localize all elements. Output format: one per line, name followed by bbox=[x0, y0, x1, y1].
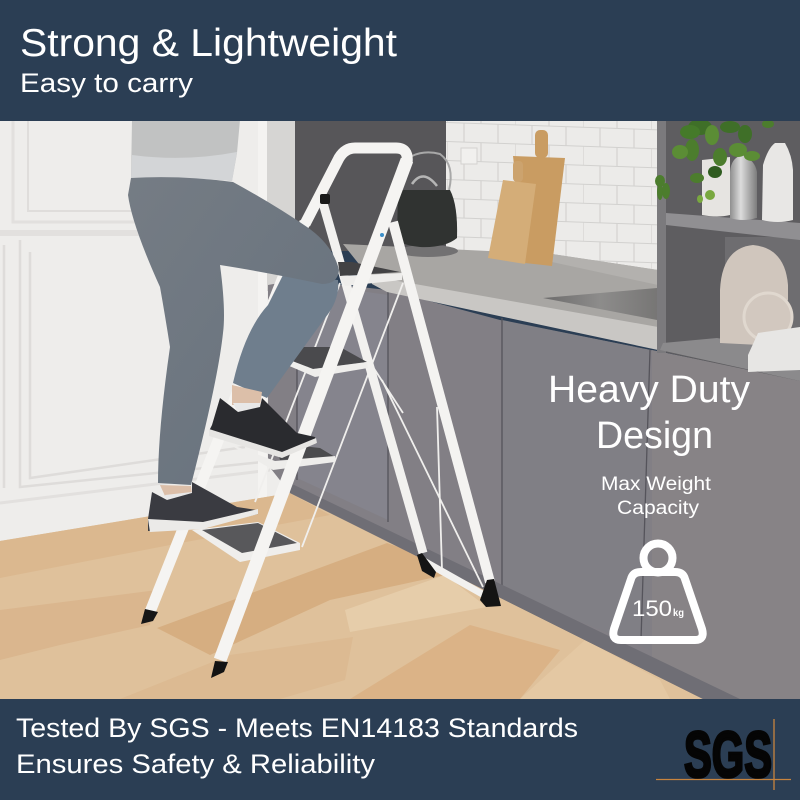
wood floor bbox=[0, 493, 720, 699]
person: shoes bbox=[148, 398, 317, 532]
ladder: step treads bbox=[192, 262, 402, 562]
callout subtext bbox=[601, 474, 712, 519]
callout: heavy duty design bbox=[548, 369, 750, 640]
person: raised leg lower section bbox=[233, 275, 338, 398]
kettle bbox=[397, 152, 458, 257]
callout heading bbox=[548, 369, 750, 457]
photo: kitchen scene bbox=[0, 119, 800, 699]
cutting boards bbox=[488, 130, 565, 266]
callout heading: Design bbox=[596, 415, 713, 457]
grey cabinet fronts bbox=[268, 280, 800, 699]
wall with moulding panels bbox=[0, 120, 300, 550]
ladder: left rail bbox=[141, 222, 305, 624]
steel sink bbox=[543, 288, 657, 320]
callout subtext: Capacity bbox=[617, 498, 700, 519]
stacked books bbox=[748, 327, 800, 372]
icon: 150 kg weight: 150 bbox=[632, 596, 672, 621]
open shelving unit bbox=[657, 121, 800, 381]
shelf decor: vases bbox=[702, 143, 793, 222]
icon: 150 kg weight bbox=[613, 544, 703, 640]
subtitle: Easy to carry bbox=[20, 68, 194, 98]
person: leggings bbox=[128, 177, 339, 485]
heading panel bbox=[0, 0, 800, 121]
ladder: front rail and arch bbox=[211, 148, 407, 678]
footer panel bbox=[0, 699, 800, 800]
white brick tiles bbox=[446, 121, 660, 291]
cabinet skirting bbox=[290, 483, 740, 699]
potted plant leaves bbox=[655, 119, 774, 203]
callout heading: Heavy Duty bbox=[548, 369, 750, 411]
footer text: Ensures Safety & Reliability bbox=[16, 749, 376, 779]
callout subtext: Max Weight bbox=[601, 474, 712, 495]
shelf decor: ribbed boards bbox=[720, 245, 792, 345]
dark wall recess bbox=[295, 121, 446, 251]
footer text bbox=[16, 713, 578, 779]
icon: 150 kg weight: kg bbox=[673, 608, 684, 619]
speckled countertop bbox=[343, 244, 658, 350]
footer text: Tested By SGS - Meets EN14183 Standards bbox=[16, 713, 578, 743]
person: ankles and socks bbox=[160, 385, 262, 502]
title: Strong & Lightweight bbox=[20, 22, 397, 65]
person: hoodie bbox=[131, 120, 240, 181]
wall socket bbox=[461, 148, 477, 164]
ladder: rear legs and wires bbox=[255, 203, 501, 607]
